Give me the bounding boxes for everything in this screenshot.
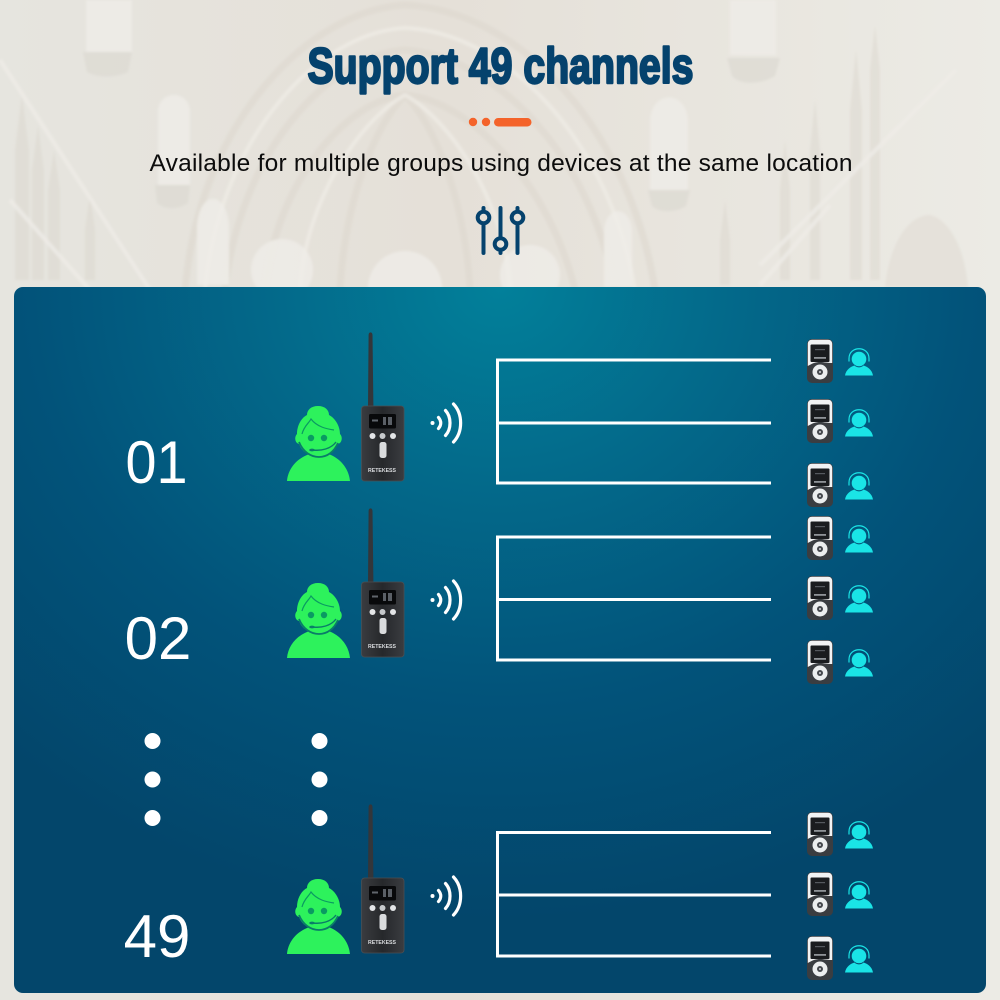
transmitter: RETEKESS (368, 644, 397, 650)
ellipsis dots: transmitters (312, 733, 328, 826)
channel number 49: 49 (124, 903, 190, 970)
icon: speaker (287, 583, 350, 658)
icon: speaker (287, 879, 350, 954)
transmitter (362, 332, 404, 481)
ellipsis dots: channel numbers (144, 733, 160, 826)
icon: speaker (287, 406, 350, 481)
distribution lines (498, 360, 771, 483)
distribution lines (498, 537, 771, 660)
transmitter: RETEKESS (368, 940, 397, 946)
distribution lines (498, 832, 771, 956)
channel 02 (125, 508, 873, 684)
receivers and listeners (807, 339, 873, 507)
channel number 01: 01 (126, 429, 188, 496)
transmitter: RETEKESS (368, 468, 397, 474)
channel 01 (126, 332, 873, 507)
icon: signal waves (430, 404, 461, 442)
channel 49 (124, 804, 873, 980)
panel: channels (14, 287, 986, 993)
receivers and listeners (807, 812, 873, 980)
icon: signal waves (430, 877, 461, 915)
transmitter (362, 804, 404, 953)
channel number 02: 02 (125, 605, 191, 672)
icon: signal waves (430, 581, 461, 619)
icon: sliders (478, 208, 523, 253)
title: Support 49 channels (308, 38, 694, 94)
receivers and listeners (807, 516, 873, 684)
subtitle: Available for multiple groups using devices at the same location (150, 150, 852, 177)
transmitter (362, 508, 404, 657)
orange divider (469, 118, 532, 126)
